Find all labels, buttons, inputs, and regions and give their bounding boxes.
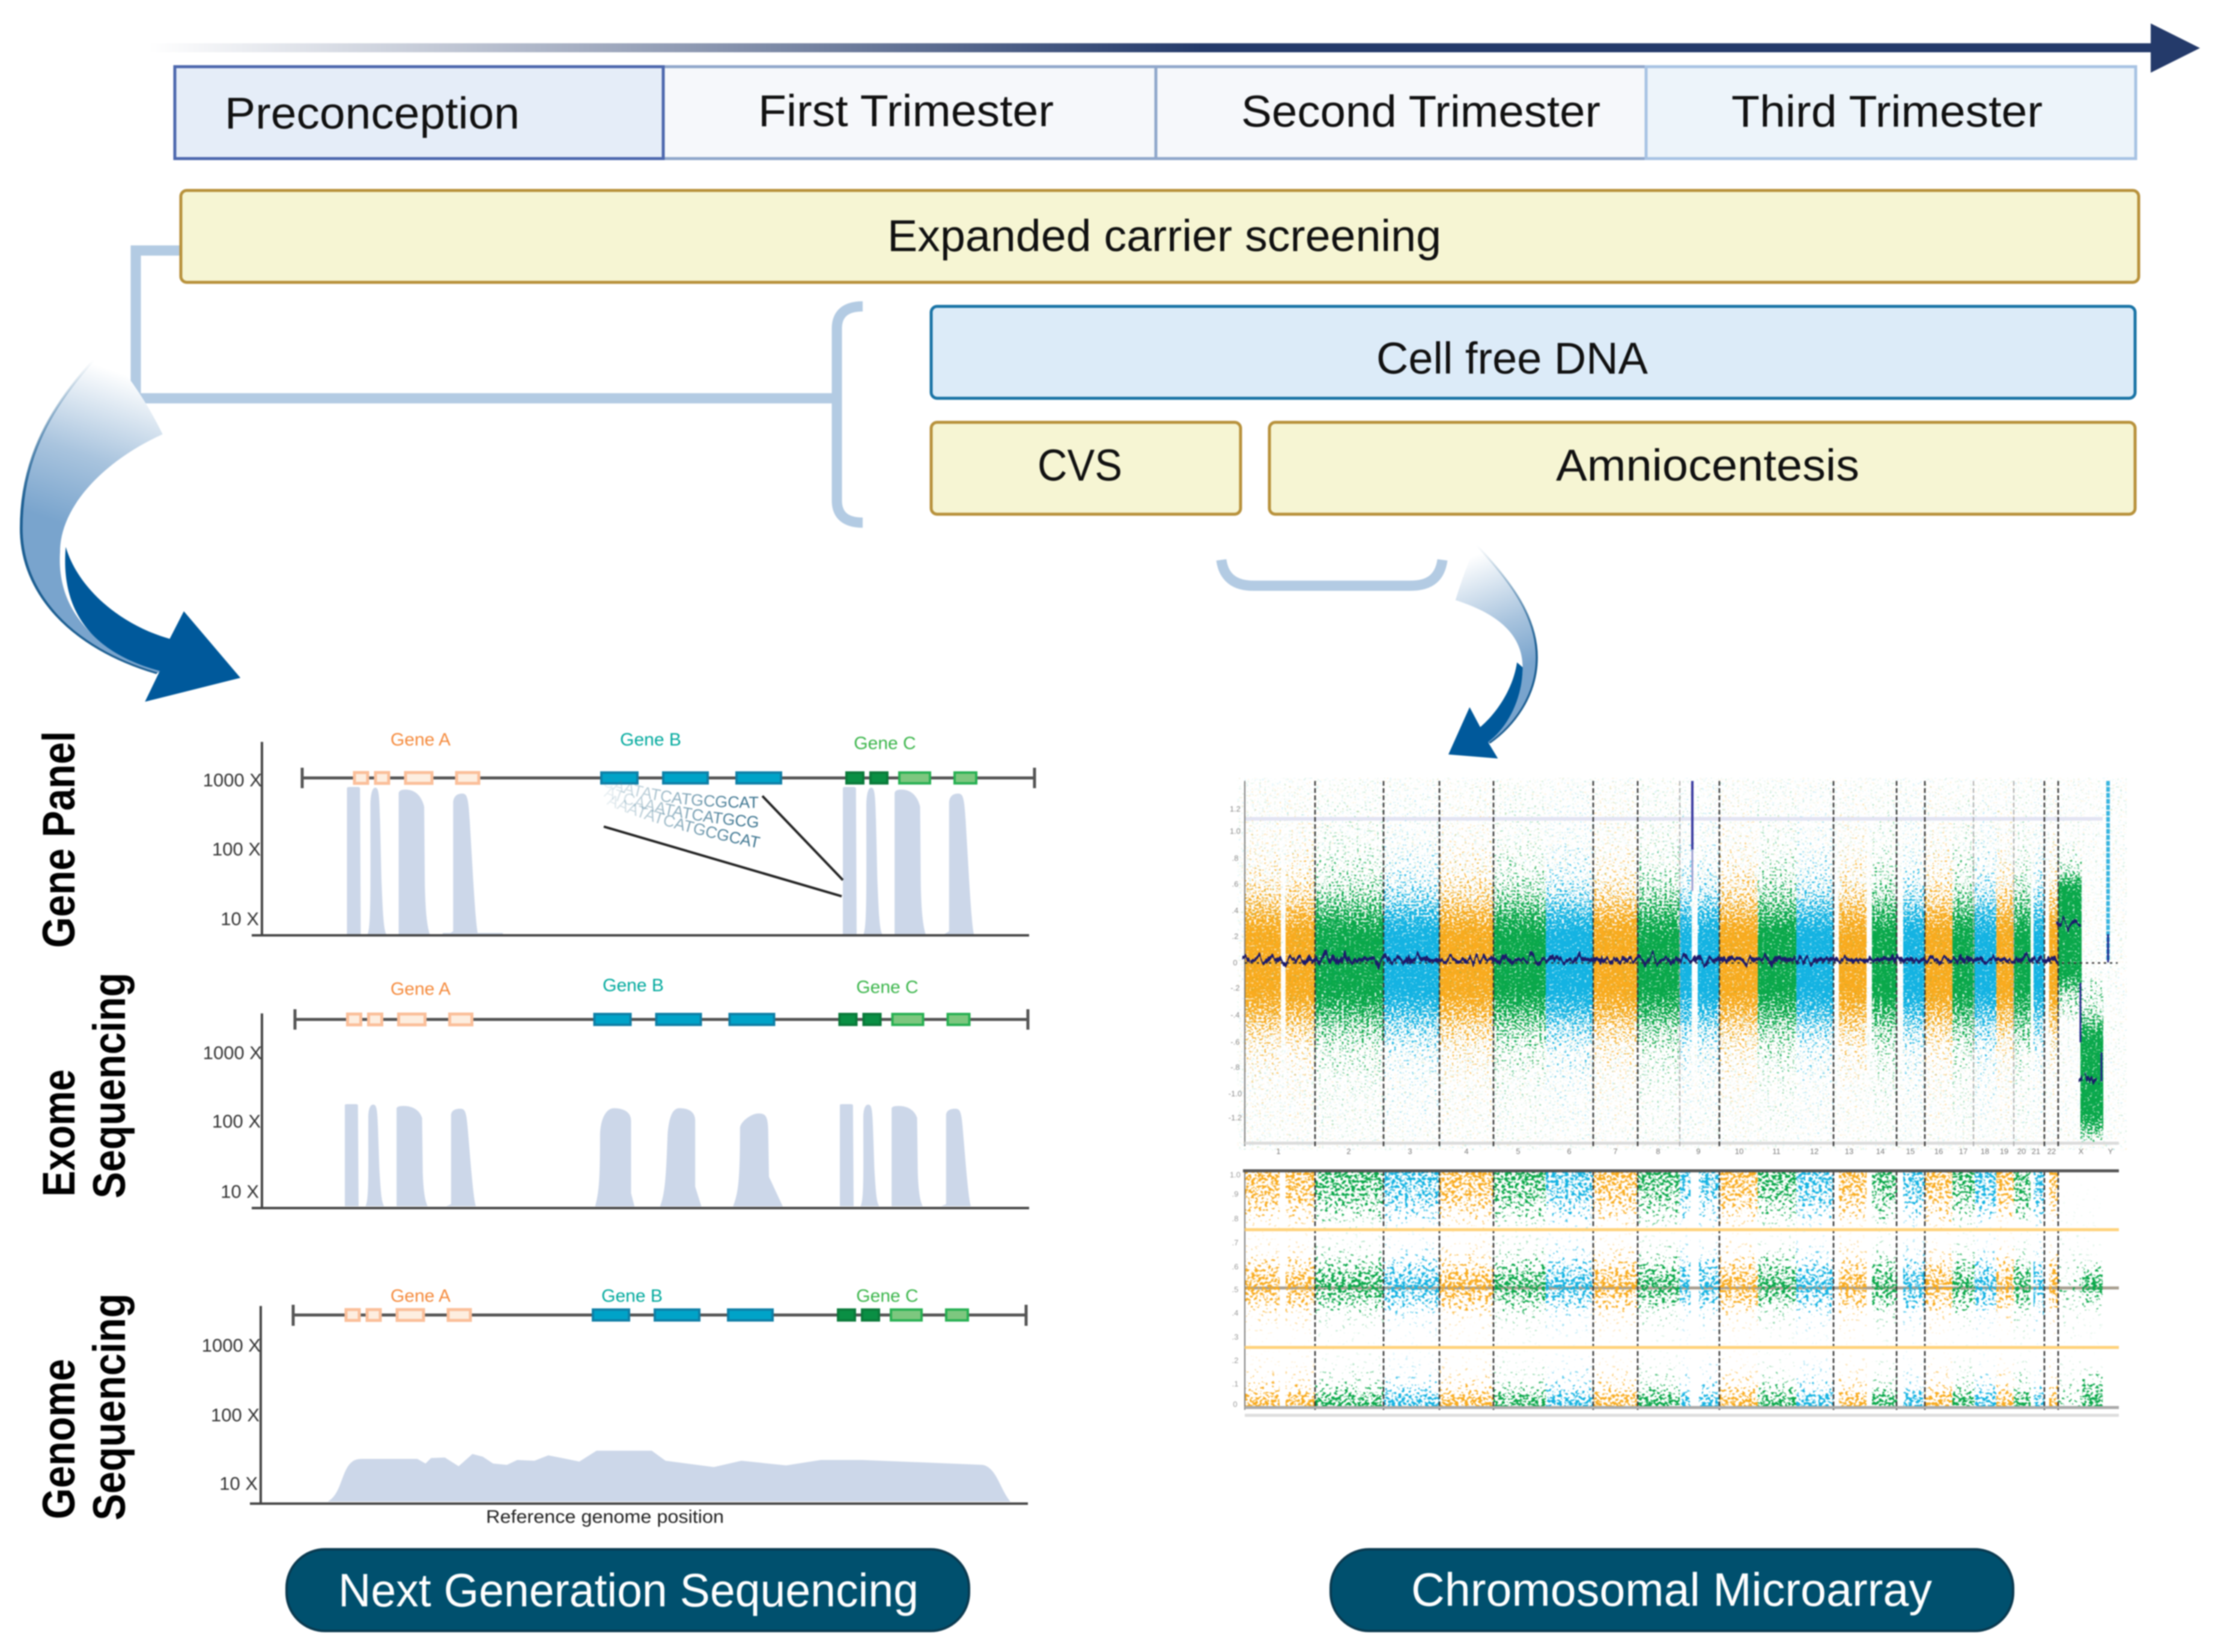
gene labels: Gene B	[603, 976, 664, 995]
blue chromosomes	[1384, 1171, 2044, 1408]
y axis tick labels: -1.2	[1229, 1113, 1242, 1122]
zoomed sequence reads: CAATCAAATATCATGCG	[604, 787, 759, 828]
axes	[252, 742, 1029, 935]
axes	[252, 1013, 1029, 1208]
chromosome labels: 11	[1772, 1147, 1781, 1156]
chromosome dividers	[1315, 1171, 2058, 1410]
y axis tick labels: .8	[1232, 1214, 1238, 1223]
y axis tick labels: -.4	[1230, 1010, 1240, 1019]
y axis labels: 10 X	[220, 908, 259, 929]
test bar: CVS: CVS	[1038, 440, 1122, 490]
stage: preconception	[175, 67, 663, 159]
blue chromosomes	[1384, 781, 2044, 1145]
chromosome labels: 1	[1276, 1147, 1281, 1156]
label: exome sequencing	[34, 973, 135, 1198]
gene track	[302, 768, 1035, 788]
gene labels	[390, 730, 916, 753]
chromosome labels: 22	[2047, 1147, 2056, 1156]
coverage peaks	[347, 787, 974, 935]
y axis labels: 1000 X	[203, 770, 262, 791]
coverage area	[327, 1451, 1010, 1502]
test bar: CVS	[931, 422, 1241, 514]
center line	[1245, 1287, 2119, 1289]
test bar: amniocentesis	[1269, 422, 2135, 514]
chart: genome sequencing coverage	[202, 1286, 1028, 1527]
y axis labels: 1000 X	[203, 1042, 262, 1063]
y axis labels: 100 X	[211, 1405, 260, 1426]
lower bracket under CVS and amniocentesis	[1221, 560, 1442, 586]
y axis tick labels: -.2	[1230, 983, 1240, 992]
label: genome sequencing: Genome	[34, 1359, 85, 1519]
y axis tick labels: .6	[1232, 879, 1238, 888]
stage: first trimester	[663, 67, 1156, 159]
orange chromosomes	[1245, 781, 2058, 1145]
chromosome labels: 7	[1613, 1147, 1618, 1156]
label: genome sequencing: Sequencing	[84, 1293, 135, 1520]
arrow: to chromosomal microarray	[1448, 545, 1537, 759]
y axis tick labels: 1.0	[1230, 1170, 1241, 1179]
coverage peaks	[345, 1104, 971, 1206]
frame and threshold lines	[1243, 1171, 2119, 1415]
y axis tick labels: 1.0	[1230, 827, 1241, 836]
axes	[250, 1306, 1028, 1504]
green chromosomes	[1315, 781, 2103, 1145]
y axis tick labels: 0	[1233, 1400, 1238, 1409]
chromosome labels: 9	[1696, 1147, 1701, 1156]
chromosome labels: 4	[1464, 1147, 1469, 1156]
chromosome labels: 20	[2017, 1147, 2026, 1156]
gene labels	[390, 1286, 919, 1306]
chromosome labels: 6	[1567, 1147, 1572, 1156]
y axis tick labels: .3	[1232, 1332, 1238, 1341]
y axis tick labels: .6	[1232, 1262, 1238, 1271]
gene labels: Gene C	[856, 977, 919, 997]
stage: third trimester: Third Trimester	[1731, 87, 2043, 136]
gene labels: Gene A	[390, 730, 451, 750]
zoomed sequence reads: AAATCAATATCATGCGCAT	[604, 780, 759, 809]
chromosome labels: 13	[1845, 1147, 1853, 1156]
gene track	[293, 1305, 1026, 1326]
stage: second trimester	[1156, 67, 1646, 159]
test bar: amniocentesis: Amniocentesis	[1556, 440, 1859, 490]
chromosome labels: Y	[2108, 1147, 2113, 1156]
chart: microarray log ratio	[1229, 781, 2119, 1156]
y axis tick labels: -.6	[1230, 1037, 1240, 1046]
button: chromosomal microarray	[1331, 1549, 2013, 1631]
chromosome labels	[1276, 1147, 2113, 1156]
chromosome 9 spike and sex chromosome steps	[1691, 781, 1694, 849]
chromosome labels: 10	[1735, 1147, 1743, 1156]
center reference line	[1245, 962, 2118, 964]
y axis labels: 100 X	[212, 1111, 261, 1132]
y axis tick labels: .2	[1232, 932, 1238, 941]
gene labels: Gene A	[390, 1286, 451, 1306]
chart: microarray B allele frequency	[1230, 1170, 2119, 1415]
y axis labels: 10 X	[219, 1473, 258, 1494]
timeline stages header	[175, 67, 2136, 159]
y axis tick labels	[1230, 1170, 1241, 1409]
x axis label: Reference genome position	[486, 1506, 724, 1527]
chromosome labels: 3	[1408, 1147, 1412, 1156]
chromosome labels: 8	[1656, 1147, 1660, 1156]
y axis tick labels: .1	[1232, 1379, 1238, 1388]
y axis tick labels: -1.0	[1229, 1089, 1242, 1098]
chromosome labels: X	[2079, 1147, 2084, 1156]
button: chromosomal microarray: Chromosomal Microarray	[1411, 1563, 1932, 1616]
button: next generation sequencing: Next Generation Sequencing	[338, 1564, 919, 1617]
threshold and frame lines	[1245, 817, 2103, 821]
button: next generation sequencing	[287, 1549, 969, 1631]
y axis labels	[202, 1335, 261, 1494]
test bar: cell free DNA	[931, 306, 2135, 398]
chart: exome sequencing coverage	[203, 976, 1029, 1208]
gene track	[295, 1009, 1028, 1030]
arrow: to next generation sequencing	[21, 347, 240, 702]
chromosome labels: 17	[1959, 1147, 1967, 1156]
y axis tick labels: -.8	[1230, 1063, 1240, 1072]
orange chromosomes	[1245, 1171, 2058, 1408]
y axis tick labels: .8	[1232, 854, 1238, 863]
green chromosomes	[1315, 1171, 2103, 1408]
test bar: expanded carrier screening: Expanded carrier screening	[887, 211, 1441, 261]
gene labels: Gene C	[856, 1286, 919, 1306]
y axis tick labels: .2	[1232, 1356, 1238, 1365]
stage: third trimester	[1646, 67, 2136, 159]
stage: first trimester: First Trimester	[758, 86, 1054, 136]
y axis tick labels: .4	[1232, 906, 1238, 915]
y axis tick labels: .4	[1232, 1308, 1238, 1317]
chromosome labels: 2	[1346, 1147, 1351, 1156]
y axis tick labels	[1229, 804, 1242, 1122]
label: exome sequencing: Sequencing	[84, 973, 135, 1198]
gene labels	[390, 976, 919, 999]
y axis tick labels: .9	[1232, 1189, 1238, 1198]
test bar: expanded carrier screening	[181, 190, 2139, 282]
y axis labels	[203, 1042, 262, 1202]
chromosome labels: 12	[1810, 1147, 1818, 1156]
gene labels: Gene B	[620, 730, 681, 750]
gene labels: Gene A	[390, 979, 451, 999]
chromosome labels: 15	[1906, 1147, 1915, 1156]
chromosome labels: 16	[1934, 1147, 1943, 1156]
chromosome labels: 5	[1516, 1147, 1521, 1156]
connector from carrier screening to bracket	[136, 251, 863, 523]
gene labels: Gene C	[854, 733, 916, 753]
label: gene panel: Gene Panel	[34, 731, 85, 948]
gene labels: Gene B	[601, 1286, 663, 1306]
chromosome labels: 14	[1876, 1147, 1885, 1156]
chromosome dividers	[1315, 781, 2058, 1146]
y axis tick labels: 1.2	[1230, 804, 1241, 813]
label: genome sequencing	[34, 1293, 135, 1520]
y axis tick labels: .5	[1232, 1285, 1238, 1294]
timeline arrow	[148, 23, 2200, 73]
y axis tick labels: .7	[1232, 1238, 1238, 1247]
label: exome sequencing: Exome	[34, 1069, 85, 1197]
y axis tick labels: 0	[1233, 958, 1238, 967]
y axis labels: 10 X	[220, 1181, 259, 1202]
chromosome labels: 21	[2032, 1147, 2040, 1156]
chart: gene panel coverage	[161, 636, 1037, 938]
y axis labels: 100 X	[212, 839, 261, 860]
smoothed log ratio trace	[1245, 922, 2100, 1081]
y axis labels	[203, 770, 262, 929]
stage: preconception: Preconception	[225, 88, 520, 138]
zoom lines	[604, 796, 843, 896]
zoomed sequence reads	[604, 780, 762, 848]
test bar: cell free DNA: Cell free DNA	[1376, 333, 1648, 383]
zoomed sequence reads: TATCAAAATATCATGCGCAT	[607, 795, 762, 848]
stage: second trimester: Second Trimester	[1241, 87, 1600, 136]
y axis labels: 1000 X	[202, 1335, 261, 1356]
chromosome labels: 19	[2000, 1147, 2008, 1156]
chromosome labels: 18	[1981, 1147, 1989, 1156]
